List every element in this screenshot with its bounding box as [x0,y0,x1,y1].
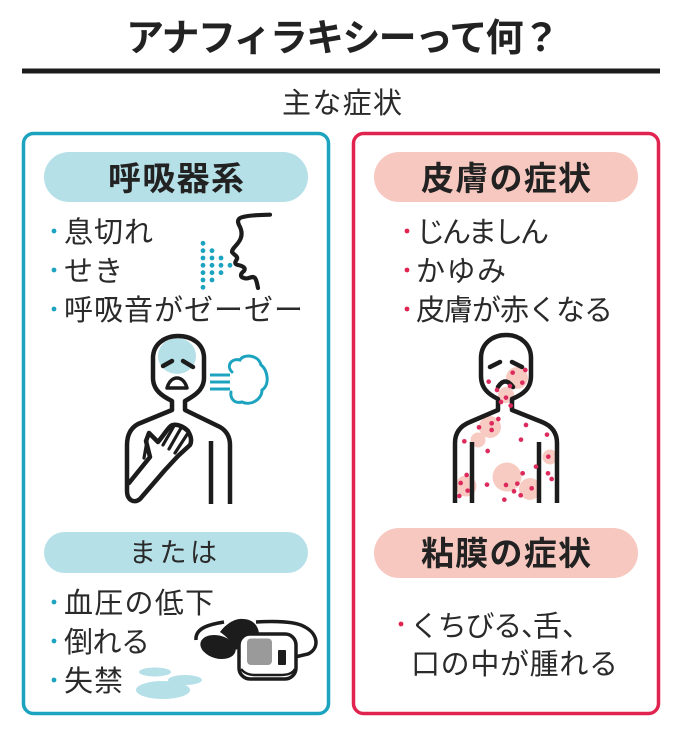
list: respiratory symptoms: 呼吸音がゼーゼー [64,294,303,327]
title rule [22,68,660,74]
list: respiratory symptoms: 息切れ [64,216,153,249]
icon: person with hives [455,335,558,503]
text: mucosal symptoms: 口の中が腫れる [411,648,618,681]
list: skin symptoms: じんましん [416,217,549,249]
list: circulatory symptoms: 倒れる [64,626,150,659]
heading: or: または [129,538,217,568]
heading: mucosal symptoms [374,528,638,578]
list: circulatory symptoms [52,587,214,698]
list: respiratory symptoms [52,216,303,327]
title: アナフィラキシーって何？ [126,18,560,60]
text: mucosal symptoms [399,610,618,681]
heading: respiratory [44,152,308,202]
list: circulatory symptoms: 血圧の低下 [64,587,214,620]
heading: skin symptoms: 皮膚の症状 [421,160,591,197]
heading: or [44,532,308,573]
list: skin symptoms [405,217,613,327]
list: skin symptoms: かゆみ [416,256,506,288]
text: mucosal symptoms: くちびる、 [410,611,550,643]
icon: puddle [136,668,202,699]
icon: blood pressure monitor [196,619,316,679]
panel: skin and mucosal symptoms [354,134,658,714]
panel: respiratory and circulatory symptoms [24,134,328,714]
icon: person with chest discomfort [127,336,230,504]
icon: exhaled breath cloud [210,356,267,403]
list: skin symptoms: 皮膚が赤くなる [416,294,613,327]
panel border: red [354,134,658,714]
heading: mucosal symptoms: 粘膜の症状 [421,535,591,572]
list: respiratory symptoms: せき [64,256,123,288]
heading: respiratory: 呼吸器系 [108,160,244,197]
subtitle: 主な症状 [282,87,402,120]
heading: skin symptoms [374,152,638,202]
text: mucosal symptoms: 舌、 [533,610,591,643]
icon: face profile with breath dots [201,215,270,290]
panel border: blue [24,134,328,714]
list: circulatory symptoms: 失禁 [64,665,123,698]
